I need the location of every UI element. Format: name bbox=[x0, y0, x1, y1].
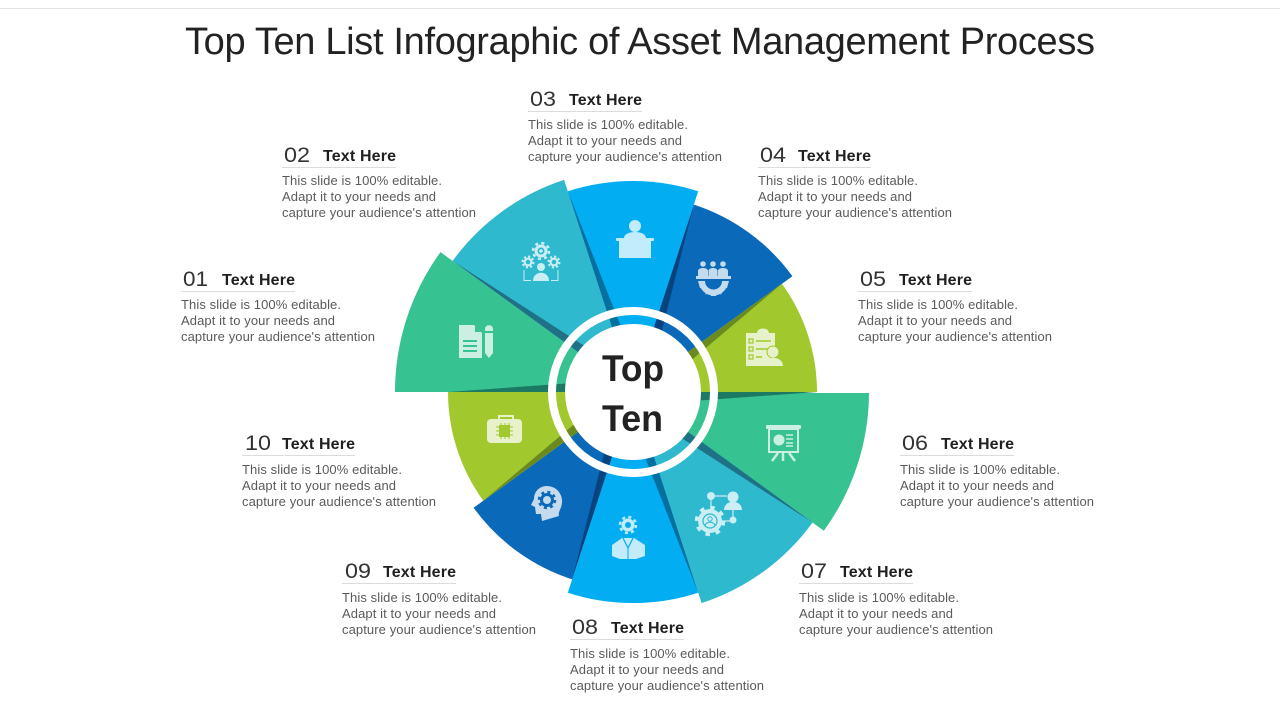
text block 07: Adapt it to your needs and bbox=[799, 606, 953, 621]
text block 09: capture your audience's attention bbox=[342, 622, 536, 637]
text block 08: Adapt it to your needs and bbox=[570, 662, 724, 677]
segment 07 bbox=[633, 392, 813, 603]
segment 10 bbox=[448, 392, 633, 501]
text block 08 bbox=[570, 615, 764, 693]
white ring bbox=[552, 311, 714, 473]
text block 09: Adapt it to your needs and bbox=[342, 606, 496, 621]
text block 01: 01 bbox=[183, 267, 208, 291]
text block 09: Text Here bbox=[383, 564, 456, 581]
text block 03: Text Here bbox=[569, 92, 642, 109]
text block 10: capture your audience's attention bbox=[242, 494, 436, 509]
text block 02 bbox=[282, 143, 476, 220]
text block 10: 10 bbox=[245, 431, 271, 455]
text block 05: capture your audience's attention bbox=[858, 329, 1052, 344]
icon: gears and person bbox=[522, 243, 560, 281]
text block 02: 02 bbox=[284, 143, 310, 167]
icon: businessman with gear bbox=[612, 517, 645, 559]
segment 09 bbox=[474, 392, 633, 579]
centre label: Ten bbox=[602, 398, 663, 439]
text block 04: Text Here bbox=[798, 148, 871, 165]
icon: briefcase with chip bbox=[487, 416, 522, 443]
text block 07: 07 bbox=[801, 559, 827, 583]
icon: person at podium bbox=[616, 220, 654, 258]
text block 03: This slide is 100% editable. bbox=[528, 117, 688, 132]
title: Top Ten List Infographic of Asset Management Process bbox=[185, 21, 1095, 63]
text block 06: Adapt it to your needs and bbox=[900, 478, 1054, 493]
text block 08: Text Here bbox=[611, 620, 684, 637]
text block 01 bbox=[181, 267, 375, 344]
segment 03 bbox=[568, 181, 698, 392]
text block 07: capture your audience's attention bbox=[799, 622, 993, 637]
text block 09: 09 bbox=[345, 559, 371, 583]
text block 07 bbox=[799, 559, 993, 637]
icon: presentation board bbox=[766, 425, 801, 461]
text block 10: This slide is 100% editable. bbox=[242, 462, 402, 477]
icon: checklist and person bbox=[746, 328, 783, 366]
text block 07: Text Here bbox=[840, 564, 913, 581]
segment 06 bbox=[633, 393, 869, 531]
text block 01: Text Here bbox=[222, 272, 295, 289]
text block 05: Text Here bbox=[899, 272, 972, 289]
text block 05: This slide is 100% editable. bbox=[858, 297, 1018, 312]
text block 02: Text Here bbox=[323, 148, 396, 165]
text block 06: 06 bbox=[902, 431, 928, 455]
centre label bbox=[602, 348, 664, 439]
text block 04 bbox=[758, 143, 952, 220]
text block 02: This slide is 100% editable. bbox=[282, 173, 442, 188]
text block 06: This slide is 100% editable. bbox=[900, 462, 1060, 477]
text block 09 bbox=[342, 559, 536, 637]
text block 01: capture your audience's attention bbox=[181, 329, 375, 344]
text block 01: Adapt it to your needs and bbox=[181, 313, 335, 328]
segment 08 bbox=[568, 392, 698, 603]
text block 06 bbox=[900, 431, 1094, 509]
text block 04: This slide is 100% editable. bbox=[758, 173, 918, 188]
text block 04: Adapt it to your needs and bbox=[758, 189, 912, 204]
text block 03: Adapt it to your needs and bbox=[528, 133, 682, 148]
text block 03: capture your audience's attention bbox=[528, 149, 722, 164]
text block 01: This slide is 100% editable. bbox=[181, 297, 341, 312]
text block 10: Text Here bbox=[282, 436, 355, 453]
text block 05: 05 bbox=[860, 267, 886, 291]
icon: document and pencil bbox=[459, 325, 493, 358]
text block 04: 04 bbox=[760, 143, 786, 167]
text block 03 bbox=[528, 87, 722, 164]
text block 09: This slide is 100% editable. bbox=[342, 590, 502, 605]
segment 04 bbox=[633, 205, 792, 392]
text block 08: This slide is 100% editable. bbox=[570, 646, 730, 661]
segment 02 bbox=[453, 180, 633, 392]
text block 07: This slide is 100% editable. bbox=[799, 590, 959, 605]
text block 03: 03 bbox=[530, 87, 556, 111]
text block 08: 08 bbox=[572, 615, 598, 639]
wheel diagram bbox=[395, 180, 869, 603]
text block 06: capture your audience's attention bbox=[900, 494, 1094, 509]
segment 01 bbox=[395, 252, 633, 392]
text block 04: capture your audience's attention bbox=[758, 205, 952, 220]
text block 10: Adapt it to your needs and bbox=[242, 478, 396, 493]
segment 05 bbox=[633, 284, 817, 392]
text block 05 bbox=[858, 267, 1052, 344]
text block 08: capture your audience's attention bbox=[570, 678, 764, 693]
icon: head with gear bbox=[531, 486, 562, 521]
text block 02: capture your audience's attention bbox=[282, 205, 476, 220]
text block 05: Adapt it to your needs and bbox=[858, 313, 1012, 328]
centre label: Top bbox=[602, 348, 664, 389]
text block 06: Text Here bbox=[941, 436, 1014, 453]
icon: team over gear bbox=[696, 261, 731, 296]
text block 10 bbox=[242, 431, 436, 509]
text block 02: Adapt it to your needs and bbox=[282, 189, 436, 204]
centre circle bbox=[565, 324, 701, 460]
icon: gear and network bbox=[696, 492, 742, 534]
